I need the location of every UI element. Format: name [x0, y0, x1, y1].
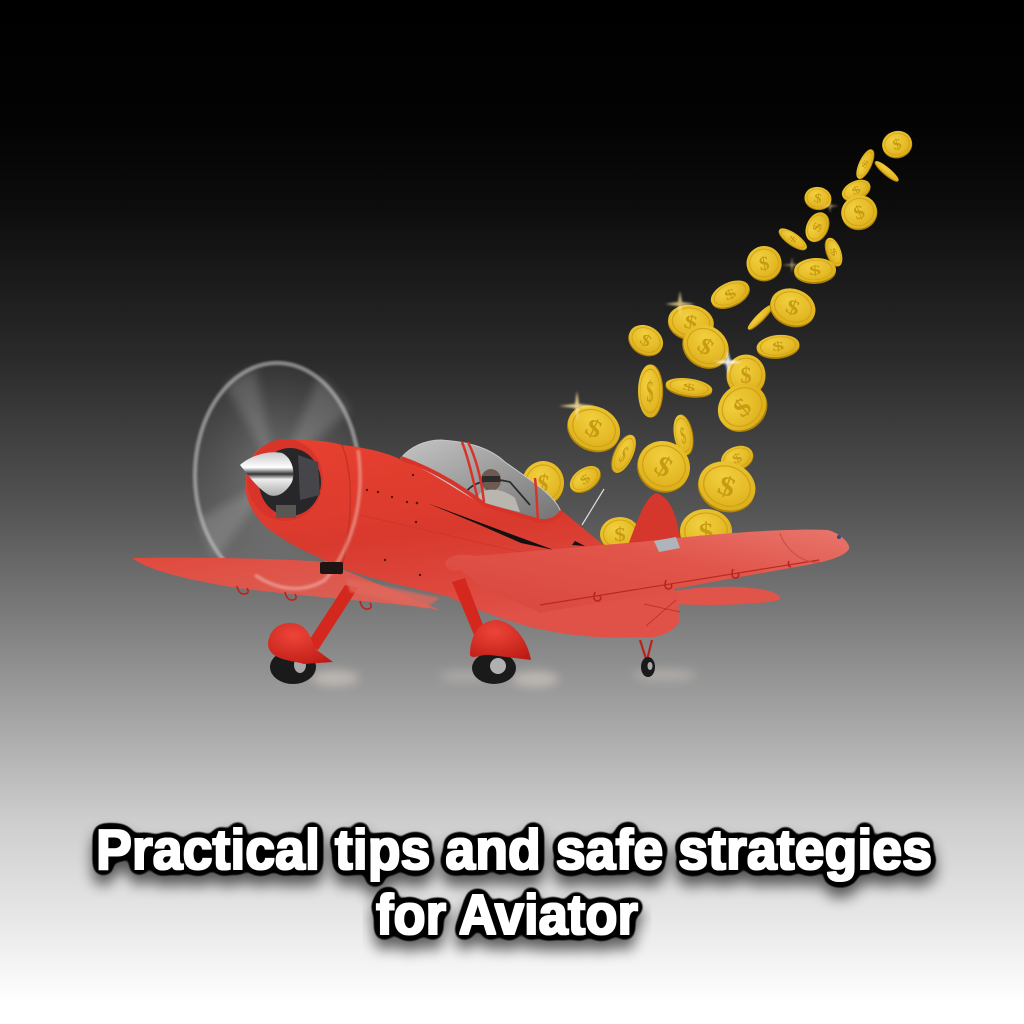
coin: $ [850, 184, 863, 198]
coin [718, 442, 757, 476]
coin: $ [851, 201, 868, 224]
coin [793, 257, 837, 285]
coin [674, 316, 737, 378]
coin: $ [534, 469, 551, 499]
coin: $ [682, 311, 699, 335]
coin [628, 432, 699, 502]
left landing gear [268, 585, 358, 684]
coin: $ [810, 220, 826, 234]
engine opening [259, 448, 321, 518]
coin [765, 282, 821, 333]
coin: $ [783, 295, 803, 321]
coin: $ [647, 376, 654, 409]
coin [680, 509, 732, 554]
propeller ring over fuselage [255, 450, 360, 588]
coin [665, 301, 717, 344]
coin: $ [693, 332, 718, 361]
coin: $ [722, 285, 739, 304]
coin [623, 319, 669, 362]
coin: $ [813, 191, 823, 207]
title line 2: for Aviator [376, 883, 638, 947]
left fender [268, 623, 333, 664]
coin [691, 454, 762, 520]
coin: $ [649, 450, 678, 484]
coin: $ [828, 246, 840, 258]
tail fin [628, 493, 680, 545]
coin [606, 431, 641, 476]
silver wing patch [654, 537, 680, 552]
coin: $ [787, 233, 799, 245]
right landing gear [452, 578, 531, 684]
left wing [132, 558, 440, 610]
coin [801, 209, 834, 246]
coin [671, 413, 696, 457]
coin [708, 374, 777, 442]
coin [746, 303, 775, 332]
coin: $ [771, 339, 785, 354]
coin: $ [699, 517, 714, 545]
propeller disc [192, 360, 362, 590]
coin [518, 458, 568, 510]
coin: $ [728, 392, 757, 423]
fuselage [246, 440, 679, 638]
coin stream [518, 128, 915, 554]
coin: $ [730, 449, 744, 467]
coin [744, 243, 784, 284]
coin: $ [577, 471, 593, 488]
red airplane [132, 360, 849, 684]
tailplane [670, 587, 780, 605]
wingtip light [837, 535, 841, 539]
canopy [401, 440, 562, 521]
coin: $ [891, 136, 903, 154]
main wing [445, 530, 849, 613]
coin: $ [809, 263, 822, 279]
title [96, 818, 932, 947]
coin [565, 461, 606, 498]
pilot [466, 469, 530, 512]
coin: $ [714, 469, 740, 504]
coin [821, 236, 846, 269]
coin [560, 397, 628, 461]
coin [726, 354, 766, 397]
wing hooks [594, 561, 791, 601]
fuselage shading and panel seams [340, 445, 680, 626]
left wheel [270, 650, 316, 684]
coin [600, 517, 640, 552]
coin [836, 190, 882, 235]
wing intake [320, 562, 343, 574]
coin: $ [614, 523, 626, 545]
dust under the wheels [311, 669, 697, 687]
title line 1: Practical tips and safe strategies [96, 818, 932, 882]
canopy frame [462, 442, 538, 520]
coin: $ [740, 363, 752, 388]
coin: $ [678, 422, 688, 449]
coin: $ [682, 381, 696, 394]
black stripe [427, 503, 554, 550]
coin [839, 176, 874, 206]
coin [664, 375, 713, 400]
coin: $ [616, 442, 632, 467]
coin: $ [860, 158, 871, 170]
coin [776, 225, 810, 254]
tail wheel [640, 640, 655, 677]
right wheel [472, 652, 516, 684]
left wing hooks [237, 586, 371, 609]
right fender [470, 620, 531, 660]
coin [873, 159, 901, 184]
antenna [582, 489, 604, 525]
coin [853, 147, 878, 181]
wing flap line [540, 560, 819, 605]
cowling nose ring [247, 439, 323, 521]
coin [755, 333, 801, 361]
coin: $ [757, 252, 771, 275]
coin [638, 364, 663, 418]
coin sparkles [559, 199, 839, 421]
coin [707, 275, 754, 315]
coin: $ [581, 413, 606, 445]
coin [879, 128, 915, 162]
coin: $ [637, 330, 655, 351]
coin [803, 185, 833, 212]
spinner [240, 452, 293, 496]
